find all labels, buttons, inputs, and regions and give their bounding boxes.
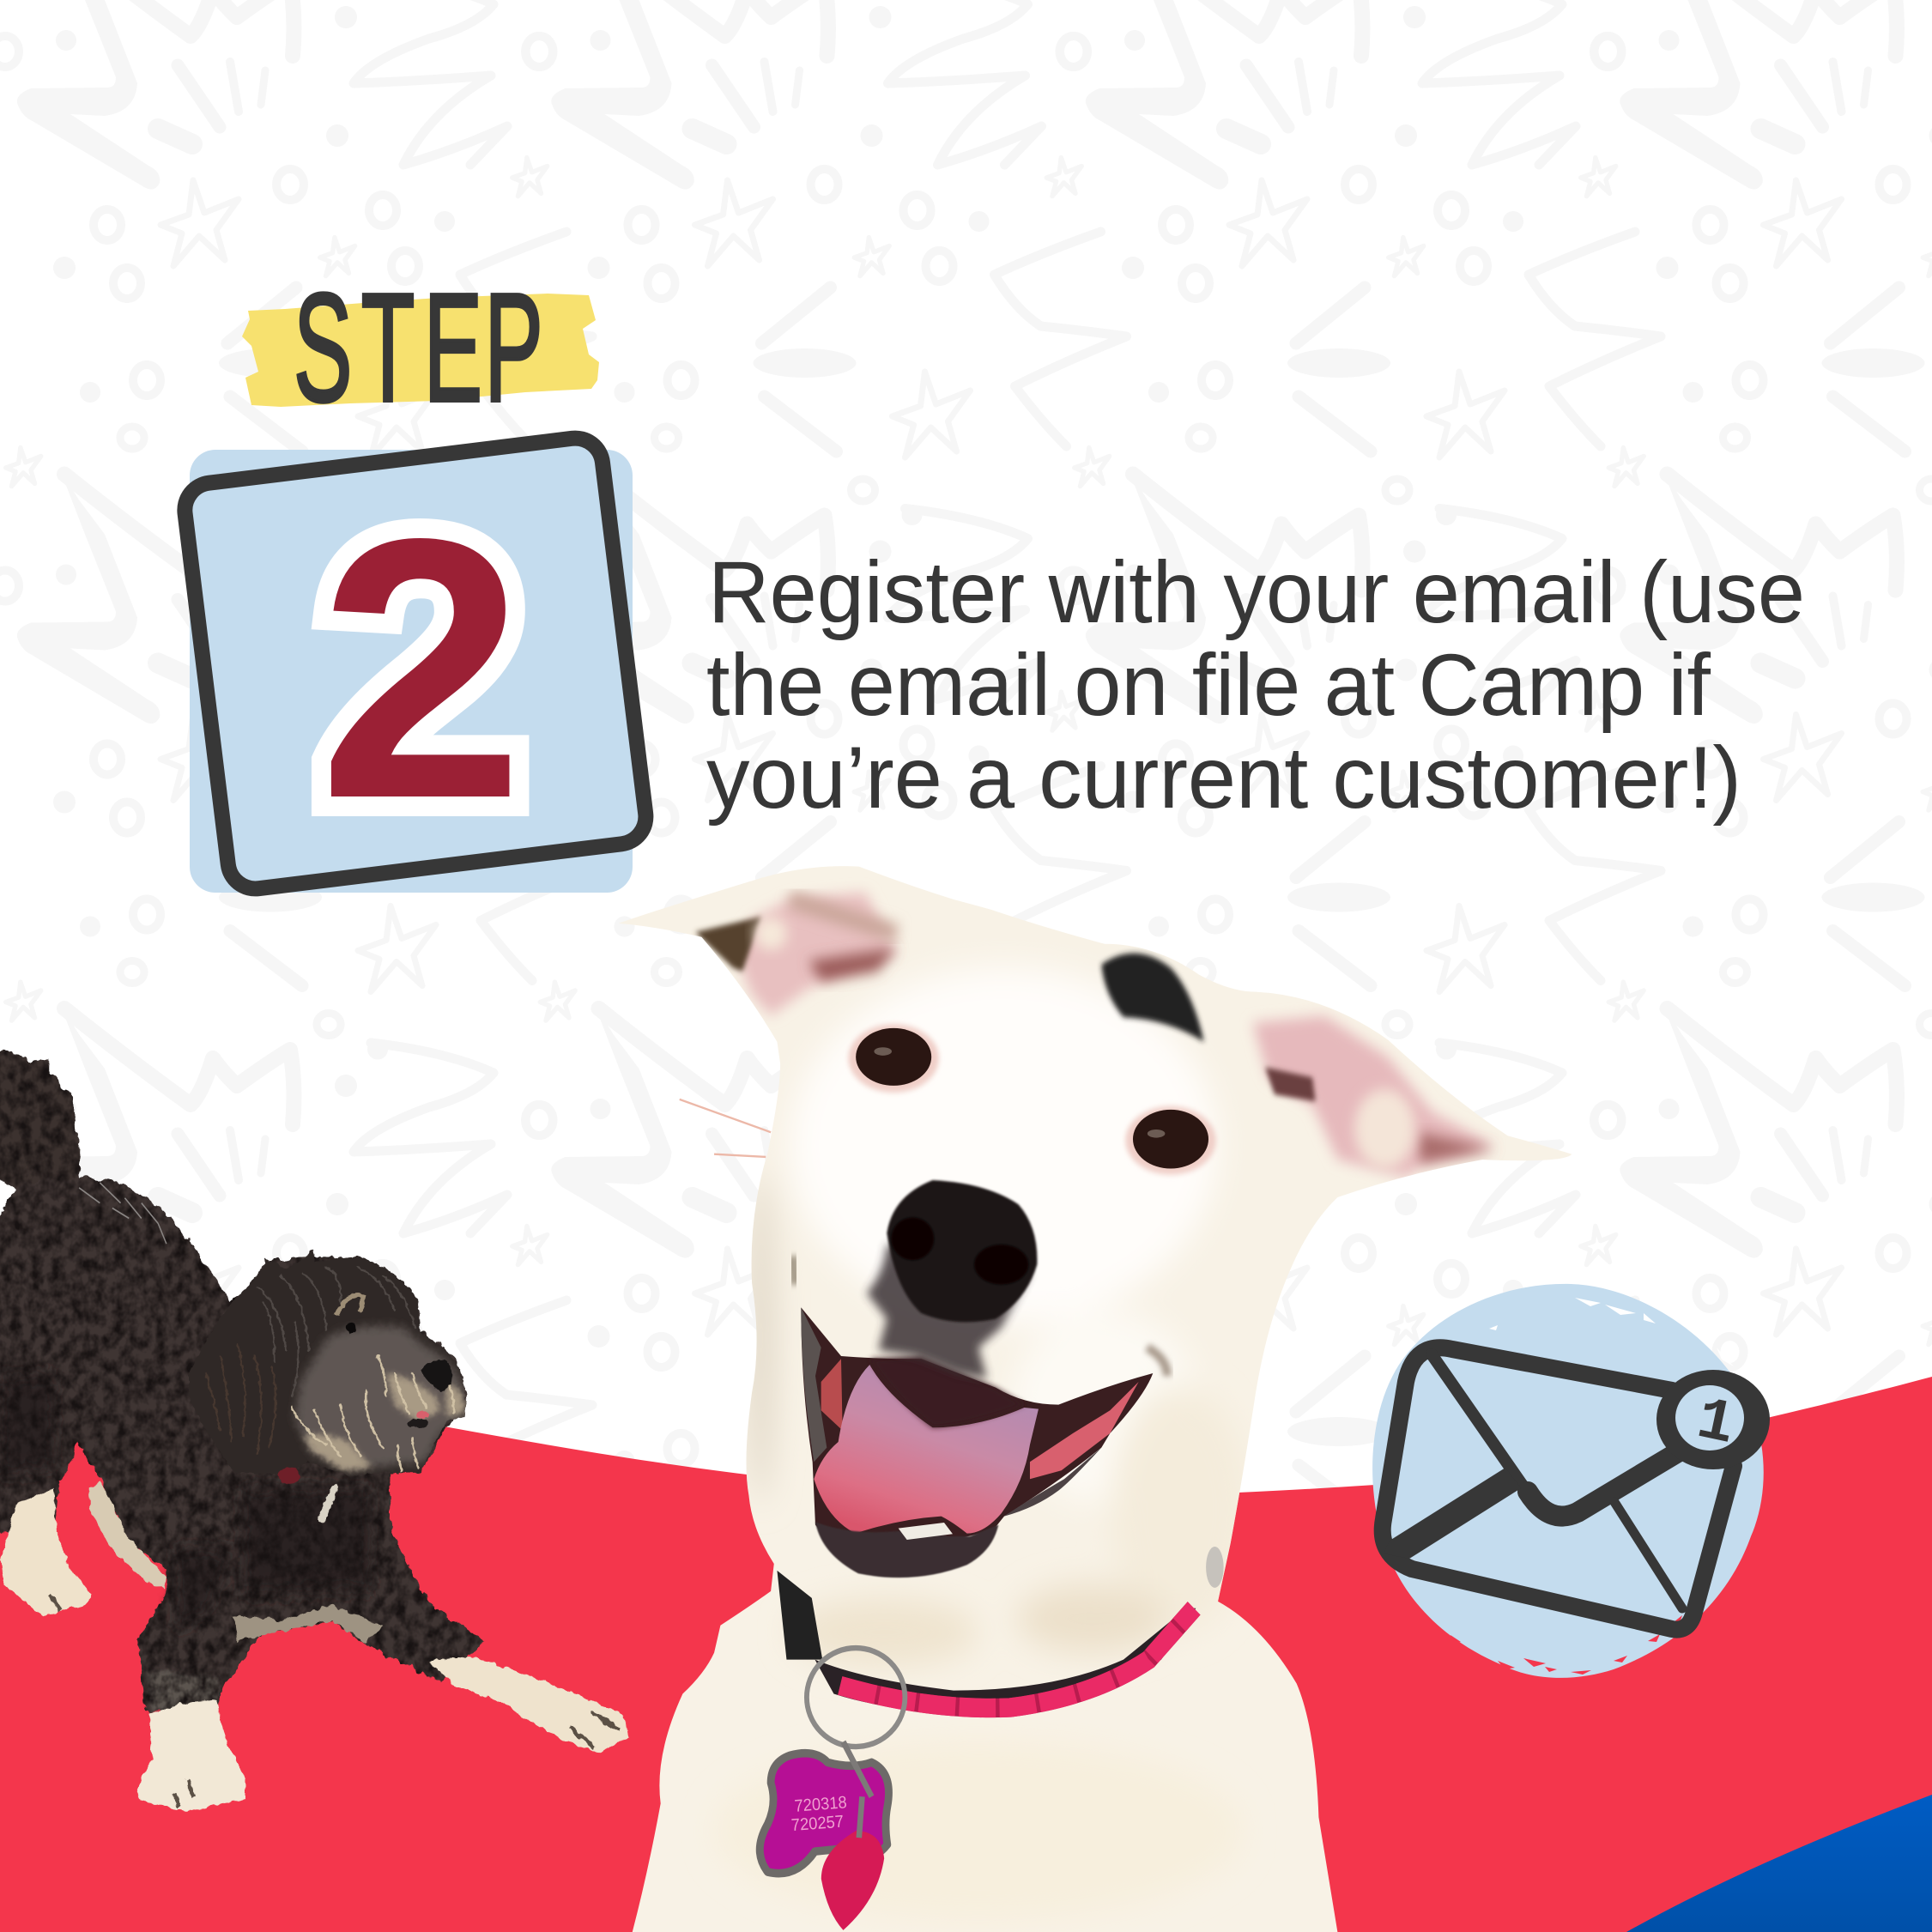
dog head <box>188 1250 467 1523</box>
dog head and body <box>601 858 1608 1932</box>
icon: envelope with notification <box>1372 1284 1770 1678</box>
tag clips <box>843 1741 871 1838</box>
fur shading <box>714 968 1250 1920</box>
tag ring <box>807 1648 905 1747</box>
instruction text: the email on file at Camp if <box>706 636 1711 734</box>
blue brush stroke corner <box>1626 1795 1932 1932</box>
right eye <box>1125 1106 1216 1175</box>
left eye <box>848 1024 939 1093</box>
instruction text <box>706 543 1805 827</box>
black curly dog <box>0 1051 628 1811</box>
white dog photo <box>601 858 1608 1932</box>
step label <box>242 262 599 434</box>
cheek folds <box>1148 1348 1167 1376</box>
badge number: 1 <box>1691 1387 1740 1461</box>
notification badge <box>1656 1370 1770 1469</box>
dark muzzle <box>867 1245 1030 1379</box>
left ear inner <box>733 893 897 1016</box>
muzzle, nose and mouth <box>792 1180 1167 1578</box>
envelope outline <box>1383 1348 1734 1630</box>
back grey strands <box>79 1183 167 1244</box>
yellow brush highlight <box>242 294 599 407</box>
lower lip and teeth <box>815 1522 998 1578</box>
bone tag: 720318 <box>794 1794 847 1816</box>
right ear inner <box>1252 1016 1495 1177</box>
light blue back square <box>190 450 633 893</box>
step word: STEP <box>294 262 543 434</box>
dog body <box>0 1051 482 1712</box>
instruction text: you’re a current customer!) <box>706 729 1741 827</box>
red wave ground <box>0 1365 1932 1932</box>
brush circle <box>1372 1284 1764 1678</box>
mouth interior <box>801 1307 1153 1542</box>
number badge <box>182 435 649 893</box>
bone tag: 720257 <box>790 1813 845 1835</box>
whiskers <box>680 1099 771 1157</box>
bone tag <box>760 1753 888 1874</box>
rough speckle edges <box>1425 1614 1682 1675</box>
dog legs and paws <box>0 1481 628 1811</box>
envelope flap lines <box>1432 1354 1682 1608</box>
tongue <box>814 1365 1039 1534</box>
tilted outlined square <box>182 435 649 892</box>
black eyebrow patch <box>1101 954 1204 1042</box>
numeral 2: 2 <box>318 463 524 875</box>
nose <box>887 1180 1037 1322</box>
dog collar tag and chest spot <box>278 1467 335 1519</box>
heart tag <box>821 1831 884 1930</box>
collar <box>777 1547 1224 1715</box>
instruction text: Register with your email (use <box>708 543 1805 641</box>
